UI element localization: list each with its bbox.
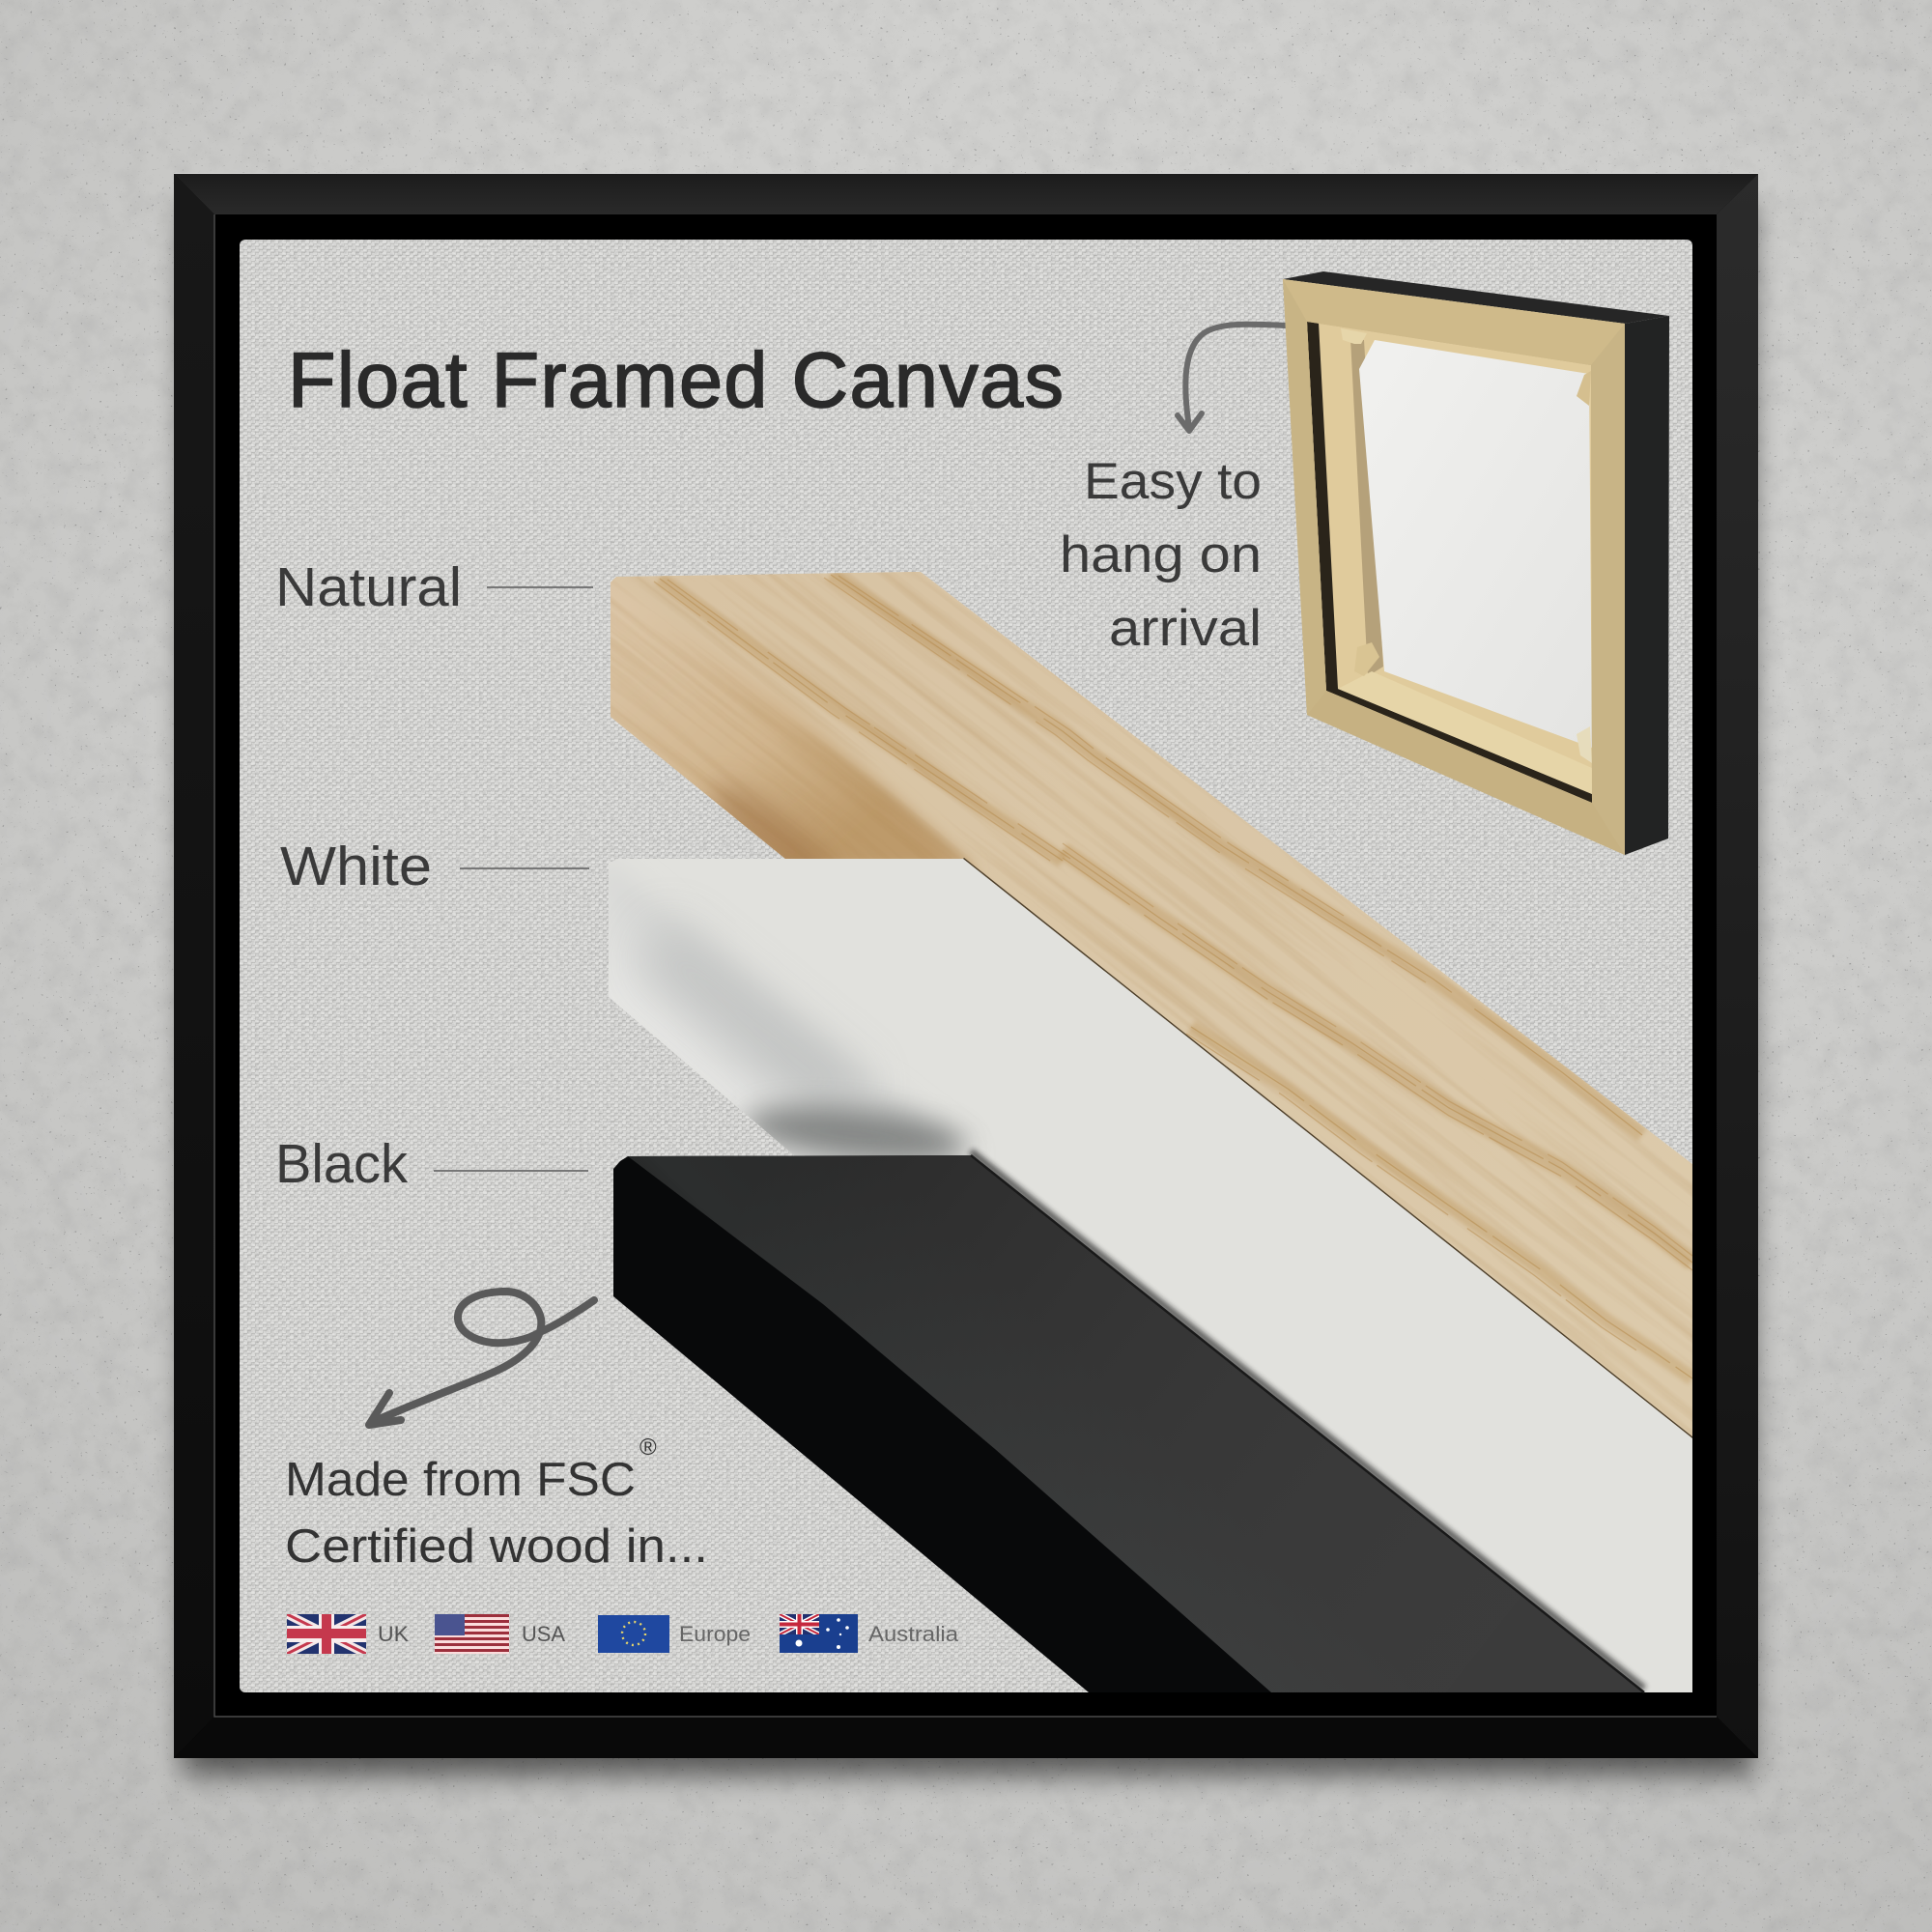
- text: Easy to: Easy to: [1084, 453, 1262, 510]
- panel: canvas surface: [240, 240, 1692, 1692]
- black frame sample: [613, 1155, 1644, 1692]
- canvas back: [1359, 340, 1592, 748]
- arrow: looped arrow from black sample to FSC note: [369, 1292, 594, 1425]
- leader line: White: [460, 867, 589, 869]
- flag: USA: [435, 1614, 509, 1654]
- wood grain bands: [654, 575, 1692, 1378]
- flag: Australia: [780, 1614, 858, 1653]
- label: Australia: Australia: [868, 1622, 959, 1646]
- white frame sample: [599, 850, 1700, 1700]
- label: White: White: [280, 836, 432, 897]
- black top side: [1283, 271, 1669, 324]
- text: arrival: arrival: [1109, 600, 1262, 657]
- panel: black float frame: [174, 173, 1758, 1758]
- natural wood frame sample: [611, 572, 1692, 1438]
- label: UK: UK: [378, 1622, 409, 1646]
- stretcher wood: [1319, 324, 1592, 768]
- registered mark: ®: [639, 1435, 657, 1461]
- label: Black: Black: [275, 1133, 408, 1195]
- label: Natural: Natural: [275, 556, 462, 618]
- text: Certified wood in...: Certified wood in...: [285, 1520, 708, 1573]
- corner wedges: [1341, 328, 1367, 344]
- wood front: [1283, 279, 1625, 855]
- label: USA: USA: [522, 1622, 565, 1646]
- label: Europe: Europe: [679, 1622, 751, 1646]
- leader line: Black: [434, 1170, 588, 1172]
- title: Float Framed Canvas: [288, 337, 1064, 424]
- text: hang on: hang on: [1060, 526, 1262, 583]
- arrow: curved arrow from small frame to callout: [1178, 325, 1285, 431]
- leader line: Natural: [487, 586, 593, 588]
- callout: easy to hang on arrival: [1060, 453, 1262, 657]
- text: Made from FSC: Made from FSC: [285, 1454, 636, 1506]
- flag row: [287, 1614, 959, 1654]
- wood bottom edge line: [963, 859, 1692, 1438]
- image: small frame rear view: [1283, 271, 1669, 855]
- flag: UK: [287, 1614, 366, 1654]
- black right side: [1625, 316, 1669, 855]
- text block: FSC note: [285, 1435, 708, 1573]
- frame shadow on wall: [184, 203, 1753, 1776]
- flag: Europe: [598, 1615, 669, 1653]
